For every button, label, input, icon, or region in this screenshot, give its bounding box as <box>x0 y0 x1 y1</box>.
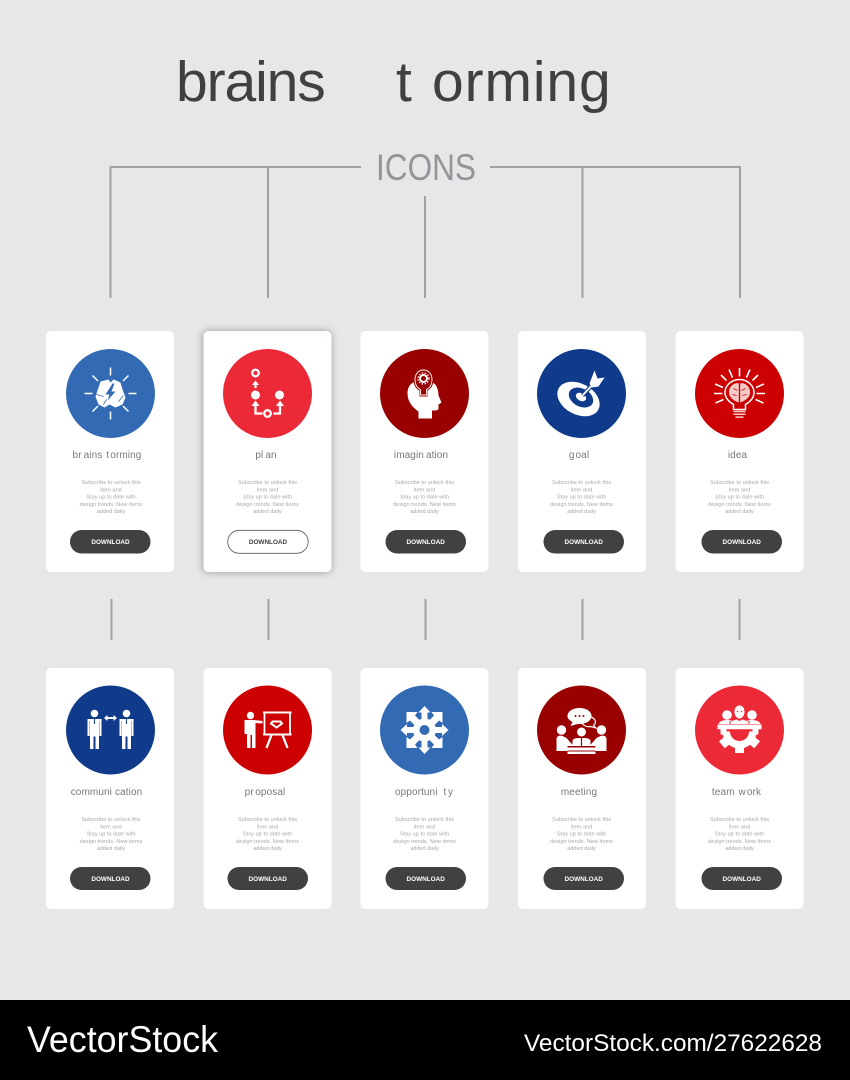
panel: brainstorming <box>46 331 174 572</box>
title: t <box>396 50 412 114</box>
download button: DOWNLOAD <box>91 539 130 546</box>
description: Subscribe to unlock this <box>710 817 769 823</box>
description: added daily <box>410 509 439 515</box>
description: Stay up to date with <box>557 832 606 838</box>
panel: plan (highlighted) <box>203 331 332 572</box>
description: Subscribe to unlock this <box>81 480 141 486</box>
description: added daily <box>97 846 126 852</box>
description: item and <box>729 487 750 493</box>
description: Subscribe to unlock this <box>552 817 611 823</box>
icon: team above gear <box>695 686 784 774</box>
icon: gear with outward arrows <box>380 686 469 774</box>
description: added daily <box>567 509 596 515</box>
label: team work <box>712 787 762 798</box>
panel: communication <box>46 668 174 909</box>
icon: people at table with speech bubbles <box>537 686 626 774</box>
panel: idea <box>676 331 804 572</box>
icon: two people with arrow <box>66 686 155 774</box>
description: design trends. New items <box>393 502 456 508</box>
download button: DOWNLOAD <box>407 539 445 546</box>
download button <box>70 867 150 890</box>
download button <box>544 530 624 554</box>
icon: bulb with brain <box>695 349 784 438</box>
title: brains <box>176 50 325 114</box>
download button: DOWNLOAD <box>723 876 761 883</box>
description: Subscribe to unlock this <box>81 817 141 823</box>
description: Subscribe to unlock this <box>238 817 297 823</box>
description: design trends. New items <box>80 502 143 508</box>
description: added daily <box>97 509 126 515</box>
panel: opportunity <box>360 668 488 909</box>
description: Subscribe to unlock this <box>238 480 297 486</box>
description: Subscribe to unlock this <box>552 480 611 486</box>
description: added daily <box>725 846 754 852</box>
panel: meeting <box>518 668 646 909</box>
description: Stay up to date with <box>715 832 764 838</box>
label: opportuni ty <box>395 787 453 798</box>
description: added daily <box>253 509 282 515</box>
download button <box>702 867 782 890</box>
description: added daily <box>410 846 439 852</box>
description: item and <box>257 824 278 830</box>
description: item and <box>414 487 435 493</box>
description: Subscribe to unlock this <box>395 480 454 486</box>
label: brains torming <box>73 450 141 461</box>
description: added daily <box>725 509 754 515</box>
description: Subscribe to unlock this <box>395 817 454 823</box>
description: Stay up to date with <box>557 495 606 501</box>
description: item and <box>729 824 750 830</box>
footer bar <box>0 1000 850 1080</box>
label: proposal <box>245 787 285 798</box>
title: orming <box>432 50 612 114</box>
description: Stay up to date with <box>715 495 764 501</box>
label: plan <box>255 450 277 461</box>
label: communi cation <box>71 787 142 798</box>
panel: proposal <box>204 668 332 909</box>
description: Subscribe to unlock this <box>710 480 769 486</box>
icon: head with idea bulb <box>380 349 469 438</box>
description: item and <box>571 487 592 493</box>
heading: ICONS: ICONS <box>376 147 476 188</box>
label: idea <box>728 450 747 461</box>
description: design trends. New items <box>550 839 613 845</box>
download button: DOWNLOAD <box>565 876 603 883</box>
connector lines middle <box>112 599 740 640</box>
description: Stay up to date with <box>86 495 136 501</box>
download button: DOWNLOAD <box>723 539 761 546</box>
download button: DOWNLOAD <box>249 876 287 883</box>
icon: presenter with board <box>223 686 312 774</box>
download button: DOWNLOAD <box>407 876 445 883</box>
label: goal <box>569 450 589 461</box>
description: Stay up to date with <box>400 495 449 501</box>
description: design trends. New items <box>393 839 456 845</box>
description: design trends. New items <box>80 839 143 845</box>
description: Stay up to date with <box>243 495 292 501</box>
description: design trends. New items <box>236 839 299 845</box>
label: imagination <box>394 450 448 461</box>
download button <box>386 867 466 890</box>
description: Stay up to date with <box>86 832 136 838</box>
description: design trends. New items <box>708 502 771 508</box>
panel: goal <box>518 331 646 572</box>
download button <box>386 530 466 554</box>
description: design trends. New items <box>236 502 299 508</box>
label: meeting <box>561 787 597 798</box>
download button <box>544 867 624 890</box>
panel: team work <box>676 668 804 909</box>
description: item and <box>100 487 122 493</box>
icon: plan path <box>223 349 312 438</box>
download button <box>702 530 782 554</box>
description: item and <box>571 824 592 830</box>
download button <box>228 867 308 890</box>
download button: DOWNLOAD <box>565 539 603 546</box>
description: item and <box>100 824 122 830</box>
download button: DOWNLOAD <box>249 539 288 546</box>
download button <box>228 530 308 553</box>
download button <box>70 530 150 554</box>
description: Stay up to date with <box>400 832 449 838</box>
description: added daily <box>567 846 596 852</box>
connector lines top <box>110 167 740 298</box>
icon: target with dart <box>537 349 626 438</box>
description: added daily <box>253 846 282 852</box>
description: item and <box>257 487 278 493</box>
footer logo: VectorStock <box>27 1019 218 1060</box>
panel: imagination <box>360 331 488 572</box>
download button: DOWNLOAD <box>91 876 130 883</box>
description: Stay up to date with <box>243 832 292 838</box>
description: item and <box>414 824 435 830</box>
description: design trends. New items <box>550 502 613 508</box>
icon: brain with lightning <box>66 349 155 438</box>
footer url: VectorStock.com/27622628 <box>524 1030 822 1057</box>
description: design trends. New items <box>708 839 771 845</box>
